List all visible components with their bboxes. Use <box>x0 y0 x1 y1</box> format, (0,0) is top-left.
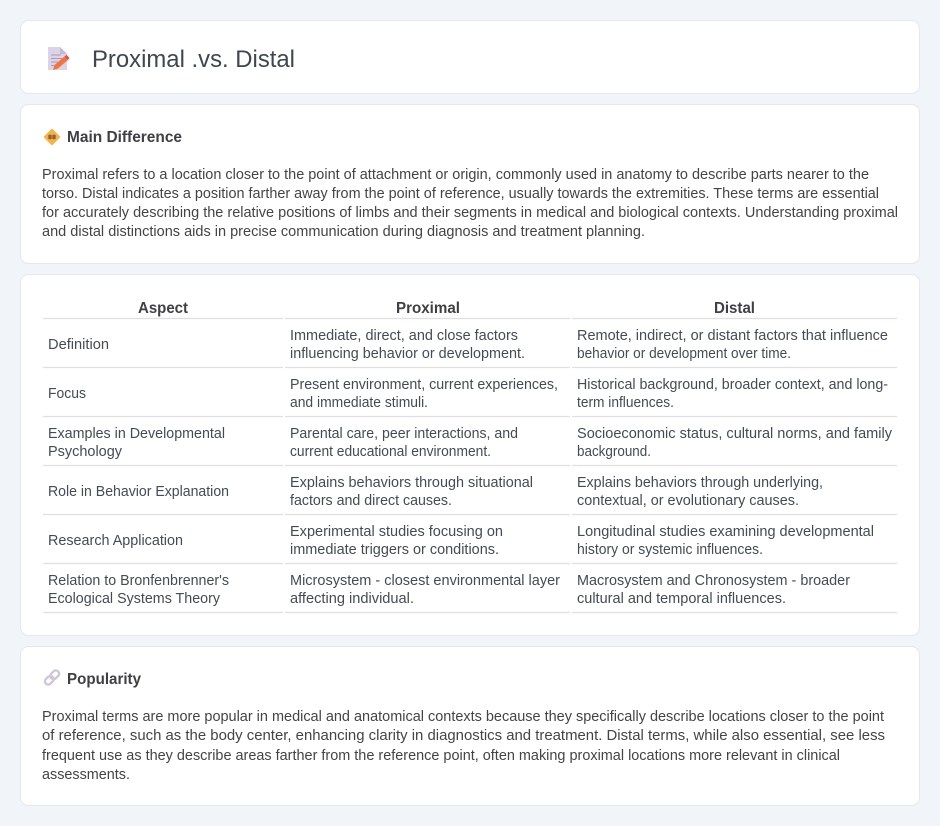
text block: popularity <box>42 709 885 783</box>
table row: focus: and immediate stimuli. <box>290 395 428 411</box>
table row: research: history or systemic influences. <box>577 542 763 558</box>
text block: main difference: for accurately describing the relative positions of limbs and their segments in medical and biological contexts. Understanding proximal <box>42 205 898 221</box>
panel: main difference <box>20 104 920 264</box>
table row: research: Longitudinal studies examining developmental <box>577 524 874 540</box>
table row: research: Experimental studies focusing on <box>290 524 503 540</box>
table row: examples: Parental care, peer interactions, and <box>290 426 518 442</box>
text block: popularity: of reference, such as the body center, enhancing clarity in diagnostics and treatment. Distal terms, while also essential, see less <box>42 728 885 744</box>
table header row: Aspect <box>138 300 189 317</box>
table row: definition <box>48 328 888 362</box>
table row: role: Role in Behavior Explanation <box>48 484 229 500</box>
table row: research: immediate triggers or conditions. <box>290 542 499 558</box>
table row: definition: influencing behavior or development. <box>290 346 525 362</box>
title: Proximal .vs. Distal <box>92 46 295 73</box>
table row: role: contextual, or evolutionary causes. <box>577 493 799 509</box>
text block: popularity: frequent use as they describe areas farther from the reference point, often making proximal locations more relevant in clinical <box>42 748 840 764</box>
table row: definition: Remote, indirect, or distant factors that influence <box>577 328 888 344</box>
table header row: Distal <box>714 300 755 317</box>
panel: title header <box>20 20 920 94</box>
table row: examples: current educational environment. <box>290 444 491 460</box>
text block: main difference: Proximal refers to a location closer to the point of attachment or origin, commonly used in anatomy to describe parts nearer to the <box>42 167 869 183</box>
table row: research: Research Application <box>48 533 183 549</box>
table row: role: Explains behaviors through situational <box>290 475 533 491</box>
table row: bronfenbrenner: Microsystem - closest environmental layer <box>290 573 560 589</box>
table row: examples: background. <box>577 444 651 460</box>
panel: popularity <box>20 646 920 806</box>
heading: main difference: Main Difference <box>67 129 182 146</box>
table row: bronfenbrenner: cultural and temporal influences. <box>577 591 786 607</box>
table row: focus <box>48 377 888 411</box>
table row: role: Explains behaviors through underlying, <box>577 475 823 491</box>
table row: bronfenbrenner: Relation to Bronfenbrenner's <box>48 573 229 589</box>
table row: definition: Immediate, direct, and close factors <box>290 328 518 344</box>
table row: examples <box>48 426 893 460</box>
table row: focus: Present environment, current experiences, <box>290 377 558 393</box>
table row: focus: Historical background, broader context, and long- <box>577 377 888 393</box>
table row: research <box>48 524 874 558</box>
table row: role <box>48 475 823 509</box>
table header row <box>138 300 755 317</box>
table header row: Proximal <box>396 300 460 317</box>
text block: popularity: assessments. <box>42 767 130 783</box>
table row: examples: Examples in Developmental <box>48 426 225 442</box>
table row: examples: Psychology <box>48 444 123 460</box>
text block: main difference <box>42 167 898 240</box>
table row: bronfenbrenner: Macrosystem and Chronosystem - broader <box>577 573 850 589</box>
text block: popularity: Proximal terms are more popular in medical and anatomical contexts because they specifically describe locations closer to the point <box>42 709 884 725</box>
table row: role: factors and direct causes. <box>290 493 452 509</box>
table row: bronfenbrenner: affecting individual. <box>290 591 414 607</box>
icon: chain link <box>44 669 60 686</box>
heading: popularity: Popularity <box>67 671 141 688</box>
icon: document with pencil <box>48 47 70 70</box>
table row: focus: Focus <box>48 386 86 402</box>
table row: bronfenbrenner <box>48 573 850 607</box>
table row: definition: behavior or development over time. <box>577 346 791 362</box>
text block: main difference: torso. Distal indicates a position farther away from the point of reference, usually towards the extremities. These terms are essential <box>42 186 879 202</box>
text block: main difference: and distal distinctions aids in precise communication during diagnosis and treatment planning. <box>42 224 645 240</box>
table row: focus: term influences. <box>577 395 674 411</box>
table row: definition: Definition <box>48 337 109 353</box>
panel: comparison table <box>20 274 920 636</box>
table row: bronfenbrenner: Ecological Systems Theory <box>48 591 221 607</box>
icon: orange diamond <box>44 128 60 146</box>
table row: examples: Socioeconomic status, cultural norms, and family <box>577 426 893 442</box>
